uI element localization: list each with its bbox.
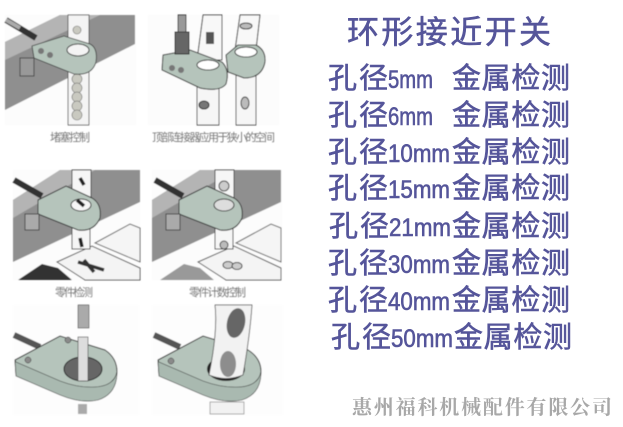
line: 6mm: 金属检测 [452, 99, 570, 132]
line: 5mm: 孔径 [328, 62, 388, 95]
panel: top connector illustration [148, 15, 279, 125]
company name footer: 惠州福科机械配件有限公司 [352, 396, 612, 419]
line: 40mm: 金属检测 [452, 284, 570, 317]
line: 15mm [328, 172, 570, 205]
spec list [328, 62, 572, 354]
line: 30mm [328, 247, 570, 280]
line: 6mm: 孔径 [328, 99, 388, 132]
title: 环形接近开关 [347, 14, 551, 50]
line: 10mm [328, 136, 570, 169]
line: 50mm [331, 321, 572, 354]
line: 5mm [328, 62, 570, 95]
line: 10mm: 孔径 [328, 136, 388, 169]
line: 50mm: 孔径 [331, 321, 391, 354]
panel: part counting illustration [152, 170, 282, 280]
line: 6mm [328, 99, 570, 132]
panel: blockage control illustration [5, 15, 136, 125]
line: 15mm: 15mm [388, 176, 450, 204]
line: 30mm: 金属检测 [452, 247, 570, 280]
line: 50mm: 50mm [391, 325, 453, 353]
caption: part counting control: 零件计数控制 [189, 285, 246, 299]
panel: part detection illustration [13, 170, 140, 280]
line: 5mm: 金属检测 [452, 62, 570, 95]
line: 21mm [329, 210, 570, 243]
line: 15mm: 金属检测 [452, 172, 570, 205]
line: 30mm: 孔径 [328, 247, 388, 280]
line: 10mm: 10mm [388, 140, 450, 168]
line: 40mm [328, 284, 570, 317]
line: 5mm: 5mm [388, 66, 433, 94]
line: 21mm: 21mm [389, 214, 451, 242]
caption: blockage control: 堵塞控制 [50, 130, 90, 144]
caption: top connector for tight spaces: 顶部连接器应用于狭小的空间 [152, 130, 275, 144]
line: 50mm: 金属检测 [454, 321, 572, 354]
line: 21mm: 孔径 [329, 210, 389, 243]
line: 6mm: 6mm [388, 103, 433, 131]
line: 30mm: 30mm [388, 251, 450, 279]
line: 10mm: 金属检测 [452, 136, 570, 169]
panel: tube through ring sensor illustration [152, 305, 283, 415]
panel: rod through ring sensor illustration [13, 305, 139, 415]
line: 15mm: 孔径 [328, 172, 388, 205]
line: 40mm: 40mm [388, 288, 450, 316]
line: 40mm: 孔径 [328, 284, 388, 317]
line: 21mm: 金属检测 [452, 210, 570, 243]
caption: part detection: 零件检测 [55, 285, 93, 299]
